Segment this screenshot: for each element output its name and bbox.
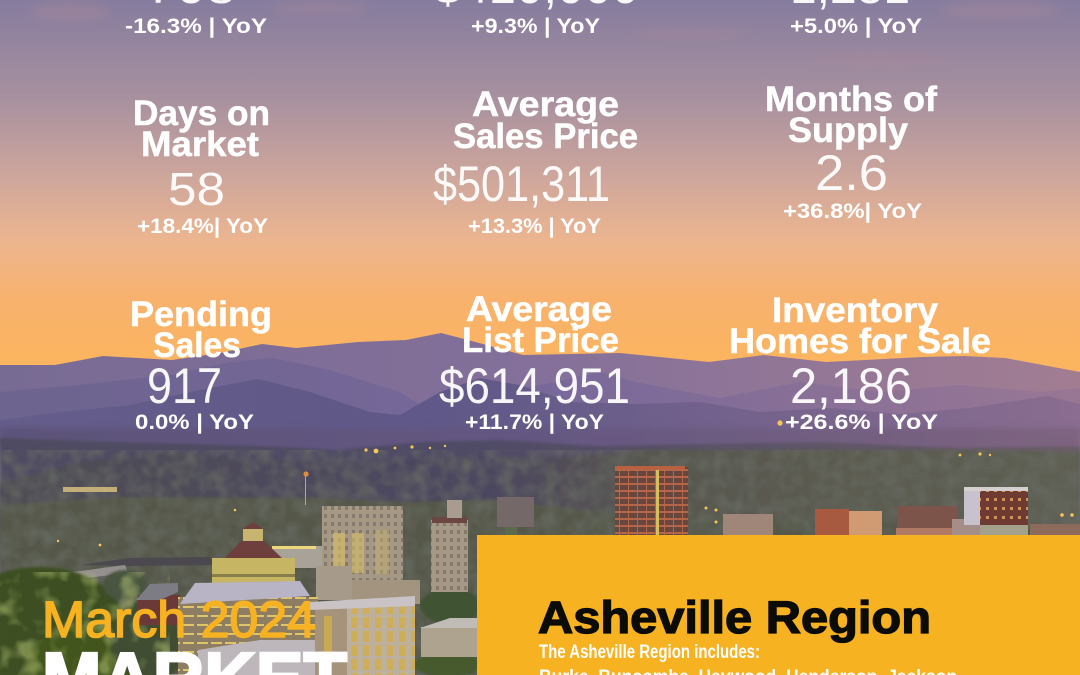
value: 2,186: [790, 358, 912, 414]
heading: Market: [141, 125, 259, 164]
stat: average list price: [439, 290, 630, 434]
valley haze band: [0, 428, 1080, 458]
distant forest ridge: [0, 438, 1080, 540]
second tower: [431, 500, 468, 592]
change: +18.4%| YoY: [137, 215, 268, 238]
value: $614,951: [439, 358, 630, 414]
small right building: [420, 618, 477, 657]
sunset sky: [0, 0, 1080, 400]
neighbourhood roofs: [50, 557, 215, 580]
heading: List Price: [462, 321, 619, 360]
civic plaza building with lit windows: [178, 581, 318, 675]
city hall dome building: [212, 522, 295, 594]
region intro: The Asheville Region includes:: [539, 641, 760, 663]
back mountain ridge: [0, 333, 1080, 440]
heading: Inventory: [772, 291, 939, 330]
panel heading: Asheville Region: [538, 592, 931, 643]
lower plaza roof: [198, 640, 315, 675]
town lights: [57, 420, 1074, 546]
glowing building behind dome: [272, 546, 322, 568]
heading: Days on: [133, 94, 270, 133]
date heading: March 2024: [42, 591, 316, 648]
front mountain ridges: [0, 378, 1080, 445]
stat: new listings (cropped at top): [790, 0, 922, 38]
heading: Supply: [788, 111, 909, 150]
pink clouds: [30, 3, 1060, 65]
foliage texture: [0, 450, 1080, 675]
foreground leaf highlights: [0, 572, 170, 675]
stat: median sales price (cropped at top): [434, 0, 639, 38]
change: 0.0% | YoY: [135, 411, 254, 434]
heading: Homes for Sale: [729, 322, 991, 361]
heading: Average: [472, 85, 619, 124]
heading: Sales Price: [453, 117, 638, 156]
heading: Sales: [153, 326, 241, 365]
stat: days on market: [133, 94, 270, 238]
heading: Pending: [130, 295, 272, 334]
construction tower: [615, 466, 688, 535]
red brick house: [136, 583, 180, 625]
heading: Average: [466, 290, 612, 329]
distant hillside building lights: [63, 487, 117, 492]
tall grand hotel tower: [316, 506, 420, 604]
change: +36.8%| YoY: [783, 200, 922, 223]
change: +13.3% | YoY: [468, 215, 601, 238]
change: +9.3% | YoY: [471, 15, 600, 38]
value: 2.6: [815, 145, 888, 201]
stat: months of supply: [765, 80, 937, 223]
radio tower with orange beacon: [303, 471, 309, 505]
forested foothills: [0, 450, 1080, 675]
value: $501,311: [433, 156, 610, 212]
stat: pending sales: [130, 295, 272, 434]
value: 917: [147, 358, 222, 414]
change: +11.7% | YoY: [465, 411, 604, 434]
middle mountain ridges: [0, 358, 1080, 440]
skyline buildings right: [723, 487, 1080, 535]
stat: inventory homes for sale: [729, 291, 991, 434]
stat: closed sales (cropped at top): [125, 0, 267, 38]
courthouse low-rise: [310, 596, 415, 675]
heading: Months of: [765, 80, 937, 119]
neighbourhood tree canopy: [0, 497, 1080, 675]
change: -16.3% | YoY: [125, 15, 267, 38]
panel background: [477, 535, 1080, 675]
report date and title: [42, 591, 347, 675]
stat: average sales price: [433, 85, 638, 238]
left foreground trees: [0, 567, 482, 675]
panel: Asheville Region: [477, 535, 1080, 675]
change: +26.6% | YoY: [785, 411, 938, 434]
change: +5.0% | YoY: [790, 15, 922, 38]
value: 58: [168, 163, 225, 215]
background tower: [497, 497, 534, 535]
